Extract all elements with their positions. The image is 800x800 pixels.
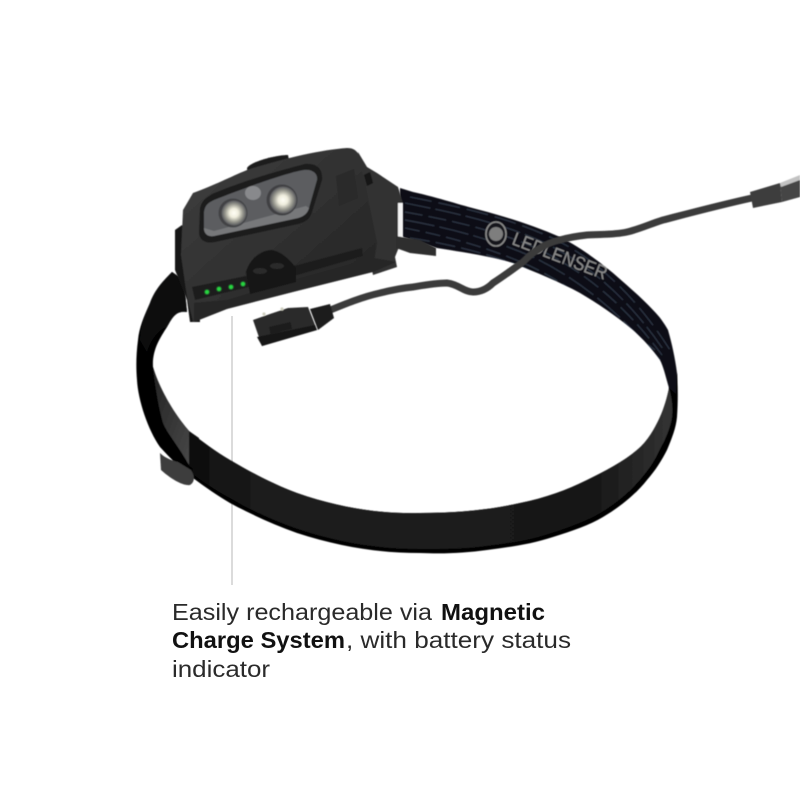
main shell — [181, 148, 377, 322]
right LED — [266, 184, 298, 216]
left LED — [218, 198, 248, 228]
magnetic connector — [253, 304, 334, 346]
strap logo text: LEDLENSER — [509, 229, 610, 285]
switch housing — [246, 250, 296, 294]
caption text: indicator — [172, 656, 270, 682]
cable end — [780, 176, 800, 202]
callout leader line — [231, 316, 233, 585]
lower dark band — [192, 248, 363, 300]
lens frame — [199, 164, 322, 243]
left strap inner face — [153, 367, 190, 465]
woven strap near body — [140, 272, 187, 352]
top button — [247, 155, 290, 178]
strap buckle clip — [160, 453, 194, 485]
caption text: Charge System — [172, 627, 345, 653]
lens window — [204, 170, 317, 236]
battery status indicator LEDs — [205, 282, 245, 294]
headlamp body — [175, 148, 436, 322]
head strap — [136, 272, 678, 553]
caption text: Magnetic — [441, 599, 545, 625]
charging cable — [328, 175, 800, 311]
side grip — [336, 169, 358, 206]
cable strain relief — [750, 183, 782, 208]
side hinge — [175, 225, 200, 322]
bracket notch — [364, 172, 373, 186]
seam on band — [189, 431, 199, 472]
caption text: , with battery status — [346, 627, 571, 653]
caption text: Easily rechargeable via — [172, 599, 432, 625]
black strap ring — [136, 272, 678, 553]
woven back strap with logo — [400, 188, 677, 394]
strap logo ring — [486, 222, 506, 246]
sensor — [245, 186, 261, 200]
headlamp infographic — [136, 147, 800, 677]
band inner face — [190, 388, 672, 549]
lower shell shadow — [194, 258, 396, 322]
rear bracket — [358, 152, 403, 275]
caption text — [172, 599, 571, 682]
